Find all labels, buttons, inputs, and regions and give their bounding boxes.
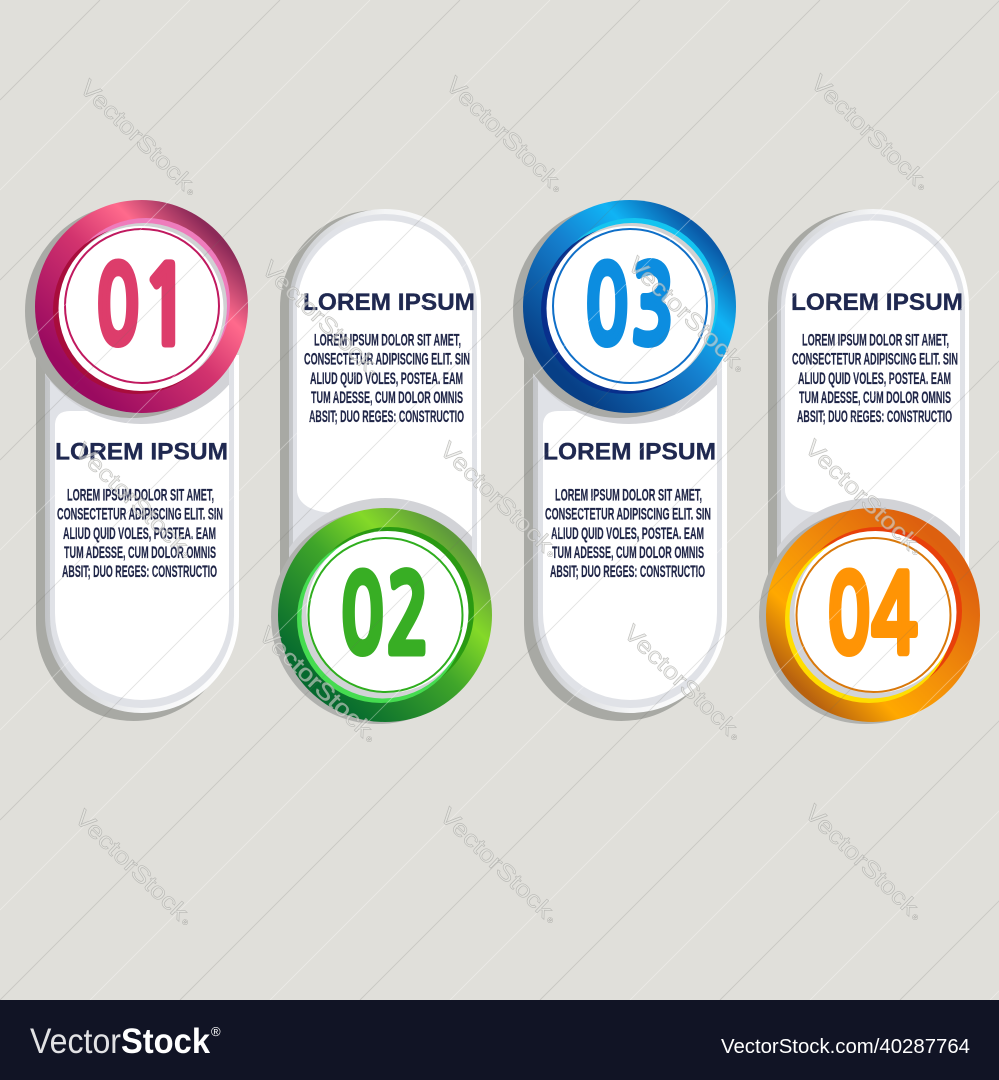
body text 1: CONSECTETUR ADIPISCING ELIT. SIN (57, 506, 223, 524)
heading 2: LOREM IPSUM (303, 289, 475, 316)
number 02: 2 (386, 563, 430, 670)
body text 2: ALIUD QUID VOLES, POSTEA. EAM (310, 370, 463, 388)
body text 2 (304, 332, 470, 426)
body text 1: TUM ADESSE, CUM DOLOR OMNIS (64, 544, 216, 562)
panel 3: blue top-badge card (511, 188, 747, 721)
watermarks: VectorStock (75, 74, 199, 195)
number 04: 4 (871, 563, 918, 670)
number 02: 0 (340, 563, 384, 670)
body text 2: LOREM IPSUM DOLOR SIT AMET, (314, 332, 461, 350)
body text 1: ABSIT; DUO REGES: CONSTRUCTIO (62, 563, 217, 581)
watermarks (70, 69, 935, 931)
watermarks: VectorStock (806, 69, 930, 190)
badge 04 (766, 508, 980, 722)
body text 3: ALIUD QUID VOLES, POSTEA. EAM (551, 525, 704, 543)
heading 4: LOREM IPSUM (791, 289, 963, 316)
number 03: 3 (630, 254, 674, 361)
footer bar (0, 1000, 999, 1080)
panel 1: pink top-badge card (23, 188, 259, 721)
watermarks: VectorStock (800, 799, 924, 920)
watermarks: ® (545, 915, 555, 926)
body text 2: ABSIT; DUO REGES: CONSTRUCTIO (309, 408, 464, 426)
footer url: VectorStock.com/40287764 (721, 1036, 970, 1058)
watermarks: ® (180, 917, 190, 928)
body text 1: LOREM IPSUM DOLOR SIT AMET, (67, 486, 214, 504)
heading 1: LOREM IPSUM (55, 438, 228, 466)
heading 3: LOREM IPSUM (543, 438, 716, 466)
watermarks: ® (910, 547, 920, 558)
body text 3: CONSECTETUR ADIPISCING ELIT. SIN (545, 506, 711, 524)
body text 2: CONSECTETUR ADIPISCING ELIT. SIN (304, 350, 470, 368)
number 01: 0 (96, 254, 140, 361)
watermarks: VectorStock (70, 804, 194, 925)
footer logo (30, 1022, 221, 1061)
watermarks: ® (551, 184, 561, 195)
watermarks: VectorStock (800, 434, 924, 555)
watermarks: VectorStock (435, 802, 559, 923)
watermarks: VectorStock (70, 437, 194, 558)
watermarks: ® (729, 732, 739, 743)
watermarks: ® (364, 734, 374, 745)
body text 2: TUM ADESSE, CUM DOLOR OMNIS (311, 389, 463, 407)
body text 4 (792, 332, 958, 426)
watermarks: ® (545, 549, 555, 560)
number 04: 0 (827, 563, 871, 670)
body text 1 (57, 486, 223, 581)
watermarks: ® (910, 912, 920, 923)
badge 02 (278, 508, 492, 722)
panel 2: green bottom-badge card (268, 209, 502, 732)
watermarks: ® (916, 182, 926, 193)
watermarks: VectorStock (619, 619, 743, 740)
body text 3: ABSIT; DUO REGES: CONSTRUCTIO (550, 563, 705, 581)
body text 3: TUM ADESSE, CUM DOLOR OMNIS (552, 544, 704, 562)
watermarks: VectorStock (623, 251, 747, 372)
badge 01 (35, 200, 248, 413)
body text 1: ALIUD QUID VOLES, POSTEA. EAM (63, 525, 216, 543)
panel 4: orange bottom-badge card (756, 209, 990, 732)
number 01 (96, 254, 192, 361)
watermarks: ® (180, 550, 190, 561)
watermarks: VectorStock (257, 255, 381, 376)
watermarks: VectorStock (435, 436, 559, 557)
watermarks: VectorStock (441, 71, 565, 192)
body text 3 (545, 486, 711, 581)
watermarks: ® (185, 187, 195, 198)
watermarks: ® (733, 364, 743, 375)
footer logo: Stock (121, 1022, 210, 1061)
body text 3: LOREM IPSUM DOLOR SIT AMET, (555, 486, 702, 504)
footer logo: Vector (30, 1022, 121, 1061)
footer logo: ® (211, 1024, 221, 1039)
number 01: 1 (141, 254, 192, 361)
watermarks: VectorStock (254, 621, 378, 742)
badge 03 (523, 200, 736, 413)
number 03: 0 (585, 254, 629, 361)
watermarks: ® (367, 368, 377, 379)
